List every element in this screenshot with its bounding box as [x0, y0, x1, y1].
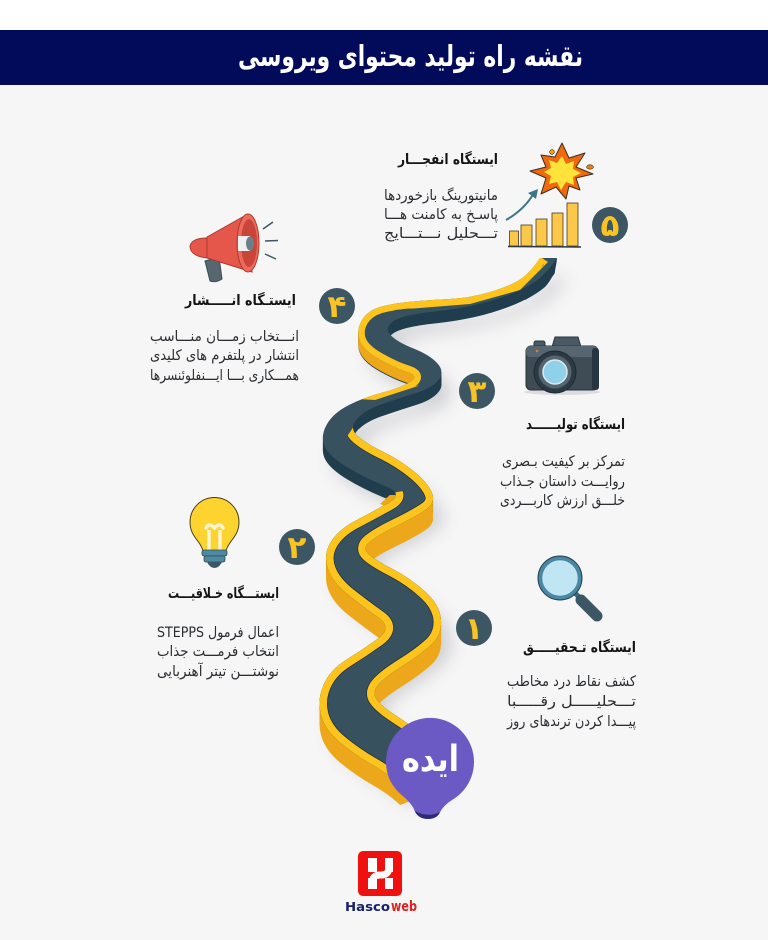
idea pin: ایده: [402, 739, 459, 780]
number badge 3: ۳: [468, 374, 487, 410]
text block: station 3: [500, 415, 625, 509]
text block: station 5: پاسـخ به کامنت هـــا: [384, 207, 498, 223]
logo: Hasco: [345, 900, 390, 914]
text block: station 4: [150, 291, 299, 384]
header band: [0, 30, 768, 85]
text block: station 4: انـــتخاب زمـــان منـــاسب: [150, 329, 299, 345]
text block: station 2: اعمال فرمول STEPPS: [157, 625, 279, 641]
winding road: [319, 258, 567, 805]
icon: magnifying glass: [538, 556, 597, 616]
number badge 2: [279, 529, 315, 566]
logo: [345, 851, 417, 915]
text block: station 5: تـــحلیل نـــتـــایج: [384, 226, 498, 242]
text block: station 4: انتشار در پلتفرم های کلیدی: [150, 348, 299, 364]
text block: station 2: [157, 584, 279, 680]
number badge 4: [319, 288, 355, 325]
text block: station 2: انتخاب فرمـــت جذاب: [157, 644, 279, 660]
number badge 2: ۲: [288, 530, 307, 566]
text block: station 1: پیـــدا کردن ترندهای روز: [506, 714, 636, 730]
text block: station 1: کشف نقاط درد مخاطب: [507, 674, 636, 690]
text block: station 2: نوشتـــن تیتر آهنربایی: [157, 662, 279, 680]
icon: light bulb: [190, 498, 239, 568]
icon: megaphone: [190, 214, 278, 282]
icon: explosion and growth chart: [506, 143, 593, 247]
title: نقشه راه تولید محتوای ویروسی: [238, 39, 583, 73]
idea pin: [386, 718, 474, 819]
text block: station 3: تمرکز بر کیفیت بـصری: [502, 454, 625, 470]
text block: station 3: ایستگاه تولیــــــد: [526, 415, 625, 433]
text block: station 3: خلـــق ارزش کاربـــردی: [500, 493, 625, 509]
number badge 5: ۵: [601, 208, 619, 244]
text block: station 3: روایـــت داستان جـذاب: [500, 474, 625, 490]
text block: station 1: [506, 638, 636, 730]
number badge 4: ۴: [328, 289, 346, 325]
text block: station 5: [384, 150, 498, 242]
text block: station 2: ایستـــگاه خـلاقیـــت: [168, 584, 279, 602]
icon: camera: [524, 337, 600, 395]
number badge 5: [592, 207, 628, 244]
text block: station 4: همـــکاری بـــا ایـــنفلوئنسرها: [150, 368, 299, 384]
text block: station 4: ایستـگاه انـــــشار: [184, 291, 296, 309]
text block: station 1: ایستگاه تـحقیـــــق: [523, 638, 636, 656]
logo: web: [391, 899, 417, 915]
number badge 1: ۱: [465, 611, 483, 647]
text block: station 5: ایستگاه انفجـــار: [397, 150, 498, 168]
text block: station 5: مانیتورینگ بازخوردها: [384, 186, 498, 204]
number badge 1: [456, 610, 492, 647]
text block: station 1: تـــحلیـــــل رقـــــبا: [507, 694, 636, 710]
number badge 3: [459, 373, 495, 410]
